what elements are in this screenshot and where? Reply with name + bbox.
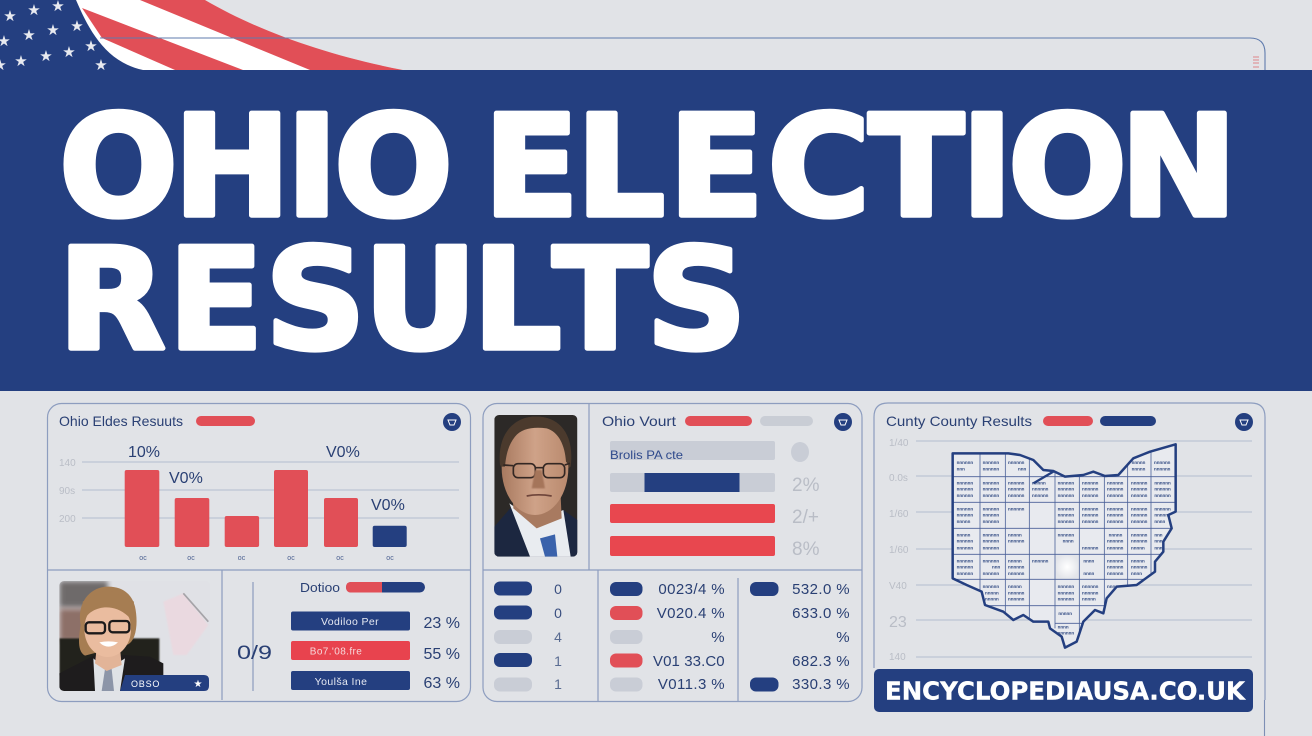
- table: middle column: V01 33.C0: [653, 653, 725, 670]
- map grid lines: 140: [889, 652, 906, 663]
- ohio county map: nnnnnn: [1058, 590, 1074, 595]
- ohio county map: nnnnnn: [1082, 545, 1099, 550]
- bar chart: oc: [238, 555, 246, 562]
- ohio county map: nnnnn: [1082, 597, 1096, 602]
- ohio county map: nnn: [992, 565, 1000, 570]
- stat rows: Youlša Ine: [315, 676, 367, 688]
- ohio county map: nnnnnn: [983, 493, 999, 498]
- bar chart: oc: [386, 555, 394, 562]
- map grid lines: [889, 438, 1252, 663]
- right edge line: [1264, 700, 1266, 736]
- table: right column: %: [836, 629, 850, 646]
- map grid lines: 1/40: [889, 438, 909, 449]
- table: right column: 532.0 %: [792, 581, 850, 598]
- ohio county map: nnnnnn: [1131, 519, 1148, 524]
- ohio county map: nnnn: [1083, 571, 1095, 576]
- table: middle column: [610, 581, 725, 693]
- ohio county map: nnnnn: [957, 532, 971, 537]
- ohio county map: nnnnnn: [1107, 493, 1124, 498]
- ohio county map: nnnnnn: [1107, 558, 1124, 563]
- ohio county map: nnnnnn: [983, 584, 999, 589]
- ohio county map: nnnnnn: [1131, 532, 1148, 537]
- ohio county map: nnnnnn: [957, 513, 973, 518]
- ohio county map: nnnnnn: [957, 539, 973, 544]
- ohio county map: nnnnnn: [957, 460, 973, 465]
- ohio county map: nnnn: [1083, 558, 1095, 563]
- map grid lines: V40: [889, 581, 907, 592]
- bar chart: oc: [287, 555, 295, 562]
- ohio county map: nnnnn: [1131, 545, 1145, 550]
- stat rows: 23 %: [424, 615, 460, 632]
- ohio county map: [950, 444, 1177, 648]
- ohio county map: nnnnnn: [1008, 480, 1025, 485]
- ohio county map: nnnnnn: [1154, 513, 1171, 518]
- photo caption badge: [120, 675, 209, 691]
- ohio county map: nnnnnn: [1131, 565, 1148, 570]
- ohio county map: nnnnnn: [983, 513, 999, 518]
- ohio county map: nnnnnn: [1032, 558, 1049, 563]
- stat rows: 63 %: [424, 675, 460, 692]
- ohio county map: nnnnnn: [983, 506, 999, 511]
- ohio county map: nnnnnn: [1058, 584, 1074, 589]
- ohio county map: nnnnnn: [1032, 487, 1049, 492]
- horizontal bars: 8%: [792, 539, 820, 560]
- table: left column: 0: [554, 581, 562, 597]
- ohio county map: nnnnnn: [1058, 480, 1074, 485]
- ohio county map: nnnnnn: [1058, 506, 1074, 511]
- ohio county map: nnnnnn: [1008, 460, 1025, 465]
- ohio county map: nnnnnn: [1008, 590, 1025, 595]
- table: right column: 633.0 %: [792, 605, 850, 622]
- american flag corner: ★: [3, 8, 17, 25]
- title banner: [0, 70, 1312, 391]
- panel heading: Cunty County Results: [886, 413, 1032, 429]
- ohio county map: nnn: [1018, 467, 1026, 472]
- data heading: [300, 580, 425, 595]
- ohio county map: nnnnn: [1109, 532, 1123, 537]
- american flag corner: ★: [62, 44, 76, 61]
- table: left column: 4: [554, 629, 562, 645]
- american flag corner: ★: [22, 27, 36, 44]
- ohio county map: nnnnnn: [1107, 519, 1124, 524]
- american flag corner: ★: [70, 18, 84, 35]
- bar chart: 200: [59, 514, 76, 525]
- ohio county map: nnnnnn: [1058, 532, 1074, 537]
- ohio county map: nnnnnn: [983, 487, 999, 492]
- ohio county map: nnnnnn: [1154, 480, 1171, 485]
- ohio county map: nnnnnn: [957, 480, 973, 485]
- ohio county map: nnnnnn: [1082, 513, 1099, 518]
- panel: county results: [874, 403, 1265, 712]
- panel heading: Ohio Vourt: [602, 413, 676, 429]
- small red marks: [1253, 57, 1259, 67]
- ohio county map: nnnnnn: [983, 467, 999, 472]
- vertical value: 0/9: [237, 643, 272, 664]
- ohio county map: nnnnnn: [1154, 467, 1171, 472]
- stat rows: Vodiloo Per: [321, 616, 379, 628]
- ohio county map: nnnnnn: [1058, 597, 1074, 602]
- bar chart: oc: [187, 555, 195, 562]
- table: right column: [750, 581, 850, 693]
- table: middle column: V020.4 %: [657, 605, 725, 622]
- ohio county map: nnnnnn: [1082, 584, 1099, 589]
- title: OHIO ELECTION: [59, 86, 1237, 249]
- ohio county map: nnnnnn: [1107, 506, 1124, 511]
- ohio county map: nnn: [1154, 532, 1163, 537]
- table: middle column: %: [711, 629, 725, 646]
- ohio county map: nnnnnn: [957, 565, 973, 570]
- photo caption badge: OBSO: [131, 679, 160, 689]
- bar chart: 10%: [128, 444, 160, 461]
- ohio county map: nnnnnn: [957, 493, 973, 498]
- table: left column: 1: [554, 653, 562, 669]
- ohio county map: nnnnnn: [1082, 590, 1099, 595]
- ohio county map: nnnnnn: [1008, 571, 1025, 576]
- ohio county map: nnnnnn: [1008, 539, 1025, 544]
- american flag corner: ★: [14, 53, 28, 70]
- american flag corner: [0, 0, 403, 74]
- ohio county map: nnnn: [1131, 571, 1142, 576]
- bar chart: 140: [59, 458, 76, 469]
- ohio county map: nnnnn: [1131, 558, 1145, 563]
- american flag corner: ★: [27, 2, 41, 19]
- ohio county map: nnnnnn: [1131, 506, 1148, 511]
- title: [58, 86, 1237, 382]
- american flag corner: ★: [94, 57, 108, 74]
- ohio county map: nnnnnn: [1107, 487, 1124, 492]
- ohio county map: nnnnnn: [1082, 506, 1099, 511]
- ohio county map: nnn: [1154, 539, 1163, 544]
- top frame outline: [100, 38, 1265, 70]
- legend pills: [1043, 416, 1156, 426]
- ohio county map: nnnnnn: [1131, 487, 1148, 492]
- table: left column: [494, 581, 562, 692]
- ohio county map: nnnnnn: [1058, 513, 1074, 518]
- ohio county map: nnnnnn: [1032, 493, 1049, 498]
- ohio county map: nnnnn: [1008, 558, 1022, 563]
- website badge: ENCYCLOPEDIAUSA.CO.UK: [885, 676, 1247, 706]
- table: left column: 1: [554, 676, 562, 692]
- ohio county map: nnnnn: [985, 597, 999, 602]
- ohio county map: nnnnnn: [983, 539, 999, 544]
- ohio county map: nnnnnn: [1131, 493, 1148, 498]
- horizontal bars: Brolis PA cte: [610, 448, 683, 462]
- data heading: Dotioo: [300, 580, 340, 595]
- horizontal bars: 2%: [792, 475, 820, 496]
- icon: badge: [443, 413, 461, 431]
- bar chart: V0%: [371, 497, 405, 514]
- portrait: man: [494, 415, 577, 557]
- ohio county map: nnnnnn: [1082, 487, 1099, 492]
- ohio county map: nnnnnn: [1058, 519, 1074, 524]
- ohio county map: nnnnn: [1132, 460, 1146, 465]
- ohio county map: nnnnn: [985, 590, 999, 595]
- ohio county map: nnnnnn: [1107, 513, 1124, 518]
- stat rows: [291, 612, 460, 692]
- ohio county map: nnnnnn: [1008, 597, 1025, 602]
- ohio county map: nnnnnn: [957, 487, 973, 492]
- ohio county map: nnnnnn: [1154, 460, 1171, 465]
- map grid lines: 1/60: [889, 509, 909, 520]
- ohio county map: nnnnnn: [957, 545, 973, 550]
- ohio county map: nnnnnn: [1058, 630, 1074, 635]
- horizontal bars: [610, 441, 820, 560]
- ohio county map: nnnnnn: [983, 532, 999, 537]
- ohio county map: nnnnnn: [1107, 539, 1124, 544]
- title: RESULTS: [58, 219, 747, 382]
- ohio county map: nnnnnn: [983, 480, 999, 485]
- photo caption badge: ★: [194, 679, 203, 690]
- ohio county map: nnnn: [1058, 624, 1069, 629]
- ohio county map: nnnnnn: [1107, 571, 1124, 576]
- panel: Ohio vote: [483, 403, 862, 702]
- table: middle column: V011.3 %: [658, 676, 725, 693]
- bar chart: [59, 444, 459, 562]
- portrait: woman: [59, 581, 210, 691]
- american flag corner: ★: [46, 22, 60, 39]
- ohio county map: nnnnn: [1132, 467, 1146, 472]
- ohio county map: nnnnnn: [1107, 565, 1124, 570]
- bar chart: V0%: [169, 470, 203, 487]
- ohio county map: nnnnnn: [983, 571, 999, 576]
- american flag corner: ★: [84, 38, 98, 55]
- ohio county map: nnnnn: [1032, 480, 1046, 485]
- ohio county map: nnnnnn: [1107, 480, 1124, 485]
- bar chart: 90s: [59, 486, 75, 497]
- ohio county map: nnn: [1154, 545, 1163, 550]
- stat rows: 55 %: [424, 646, 460, 663]
- ohio county map: nnnnnn: [1131, 513, 1148, 518]
- ohio county map: nnnnnn: [983, 460, 999, 465]
- table: right column: 682.3 %: [792, 653, 850, 670]
- bar chart: oc: [139, 555, 147, 562]
- ohio county map: nnnn: [1063, 539, 1074, 544]
- horizontal bars: 2/+: [792, 507, 819, 528]
- american flag corner: ★: [39, 48, 53, 65]
- icon: badge: [1235, 413, 1253, 431]
- ohio county map: nnnnnn: [1058, 493, 1074, 498]
- ohio county map: nnnnn: [1107, 584, 1121, 589]
- ohio county map: nnnnn: [1008, 584, 1022, 589]
- stat rows: Bo7.'08.fre: [310, 646, 362, 658]
- ohio county map: nnnnnn: [1082, 519, 1099, 524]
- ohio county map: nnnnnn: [1154, 506, 1171, 511]
- ohio county map: nnnnnn: [1082, 480, 1099, 485]
- map grid lines: 1/60: [889, 545, 909, 556]
- ohio county map: nnnnnn: [957, 558, 973, 563]
- bar chart: oc: [336, 555, 344, 562]
- ohio county map: nnnnnn: [1008, 493, 1025, 498]
- ohio county map: nnnnnn: [983, 545, 999, 550]
- map grid lines: 23: [889, 614, 907, 631]
- ohio county map: nnnnn: [1008, 532, 1022, 537]
- vertical value: [237, 582, 272, 691]
- ohio county map: nnnnnn: [983, 519, 999, 524]
- ohio county map: nnnnnn: [1082, 493, 1099, 498]
- ohio county map: nnnnnn: [1058, 487, 1074, 492]
- ohio county map: nnn: [957, 467, 965, 472]
- map grid lines: 0.0s: [889, 473, 908, 484]
- ohio county map: nnnnnn: [1131, 480, 1148, 485]
- ohio county map: nnnnnn: [1008, 487, 1025, 492]
- ohio county map: nnnnnn: [983, 558, 999, 563]
- ohio county map: nnnnn: [957, 519, 971, 524]
- ohio county map: nnnnn: [1058, 611, 1072, 616]
- website badge: [874, 669, 1253, 712]
- icon: badge: [834, 413, 852, 431]
- ohio county map: nnnnnn: [1154, 493, 1171, 498]
- ohio county map: nnnn: [1154, 519, 1166, 524]
- panel: Ohio results: [47, 404, 470, 702]
- ohio county map: nnnnnn: [957, 571, 973, 576]
- ohio county map: nnnnnn: [1131, 539, 1148, 544]
- legend pills: [685, 416, 813, 426]
- table: left column: 0: [554, 605, 562, 621]
- ohio county map: nnnnnn: [1107, 545, 1124, 550]
- ohio county map: nnnnnn: [957, 506, 973, 511]
- ohio county map: nnnnnn: [1008, 506, 1025, 511]
- panel heading: Ohio Eldes Resuuts: [59, 413, 183, 429]
- ohio county map: nnnnnn: [1008, 565, 1025, 570]
- legend pill: [196, 416, 255, 426]
- bar chart: V0%: [326, 444, 360, 461]
- ohio county map: nnnnnn: [1154, 487, 1171, 492]
- table: right column: 330.3 %: [792, 676, 850, 693]
- table: middle column: 0023/4 %: [658, 581, 725, 598]
